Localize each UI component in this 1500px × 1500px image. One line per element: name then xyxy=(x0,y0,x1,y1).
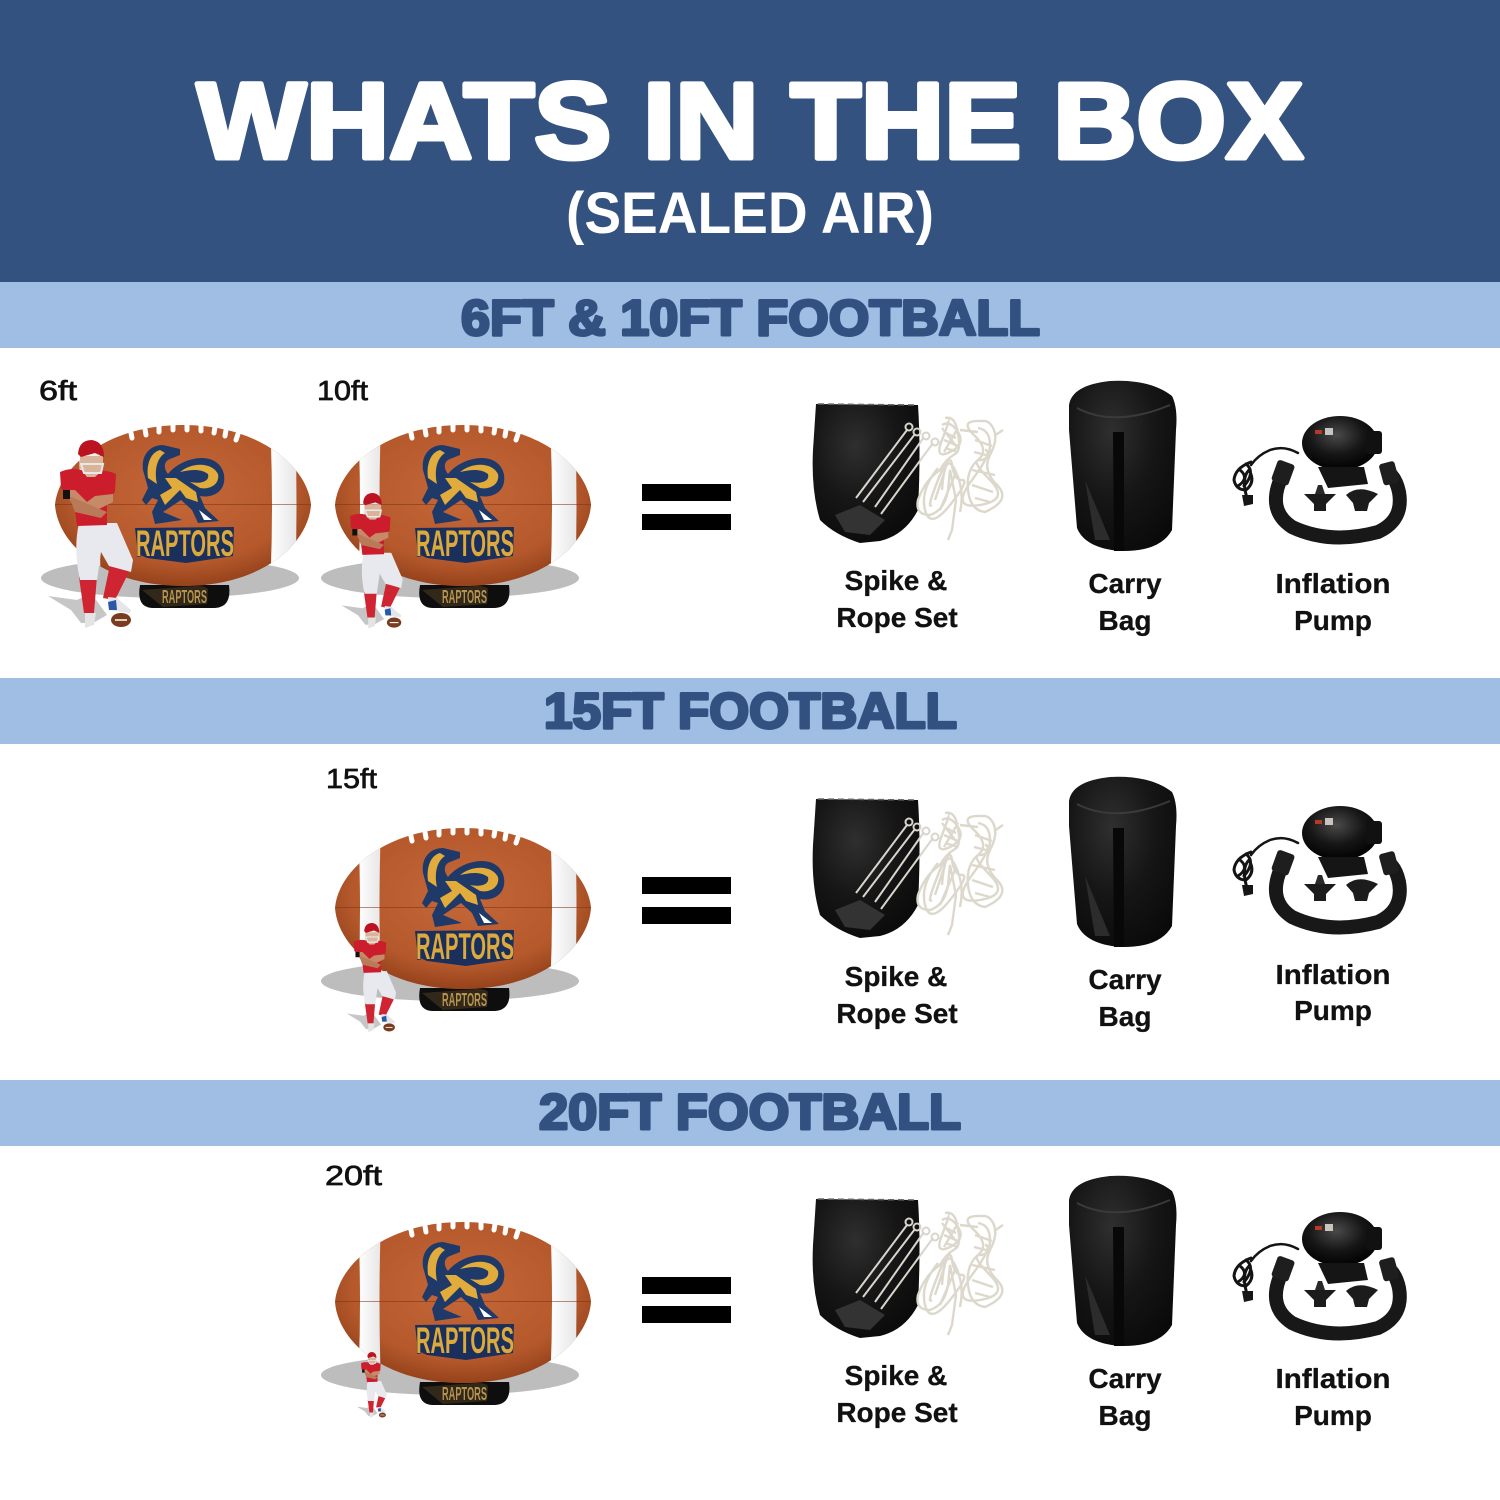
inflation pump 3 xyxy=(1234,1212,1400,1333)
label: spike and rope set 2 xyxy=(836,961,958,1029)
10ft football with player: RAPTORS xyxy=(442,587,487,607)
10ft football with player: RAPTORS xyxy=(416,523,514,564)
section 2 band xyxy=(0,678,1500,744)
label: spike and rope set 3 xyxy=(836,1360,958,1428)
label: carry bag 2: Carry xyxy=(1088,964,1162,995)
label: spike and rope set 2: Spike & xyxy=(845,961,947,992)
section 3 band xyxy=(0,1080,1500,1146)
label: carry bag 2: Bag xyxy=(1099,1001,1151,1032)
label: inflation pump 1: Inflation xyxy=(1276,568,1390,599)
label: inflation pump 3: Inflation xyxy=(1276,1363,1390,1394)
15ft football with player xyxy=(321,823,595,1032)
20ft football with player: RAPTORS xyxy=(442,1384,487,1404)
20ft football with player xyxy=(321,1217,595,1418)
6ft football with player: RAPTORS xyxy=(136,523,234,564)
label: carry bag 3 xyxy=(1088,1363,1162,1431)
label: spike and rope set 1: Spike & xyxy=(845,565,947,596)
section 1 size label: 6ft: 6ft xyxy=(39,375,77,406)
title: WHATS IN THE BOX xyxy=(197,60,1303,181)
section 1 size label: 10ft: 10ft xyxy=(317,375,368,406)
section 1 heading: 6FT & 10FT FOOTBALL xyxy=(461,290,1040,346)
label: carry bag 1: Carry xyxy=(1088,568,1162,599)
label: inflation pump 3 xyxy=(1276,1363,1390,1431)
20ft football with player: RAPTORS xyxy=(416,1320,514,1361)
label: spike and rope set 3: Spike & xyxy=(845,1360,947,1391)
header panel xyxy=(0,0,1500,282)
15ft football with player: RAPTORS xyxy=(416,926,514,967)
carry bag 1 xyxy=(1069,381,1176,551)
label: carry bag 1 xyxy=(1088,568,1162,636)
label: carry bag 1: Bag xyxy=(1099,605,1151,636)
label: spike and rope set 3: Rope Set xyxy=(836,1397,958,1428)
6ft football with player xyxy=(41,420,315,628)
subtitle: (SEALED AIR) xyxy=(566,181,934,246)
label: inflation pump 2 xyxy=(1276,959,1390,1026)
label: carry bag 3: Bag xyxy=(1099,1400,1151,1431)
equals sign 1 xyxy=(642,484,731,530)
section 2 size label: 15ft: 15ft xyxy=(326,763,377,794)
section 2 heading: 15FT FOOTBALL xyxy=(544,683,957,739)
section 3 heading: 20FT FOOTBALL xyxy=(539,1084,961,1140)
label: inflation pump 1 xyxy=(1276,568,1390,636)
label: spike and rope set 1 xyxy=(836,565,958,633)
label: inflation pump 2: Inflation xyxy=(1276,959,1390,990)
section 3 size label: 20ft: 20ft xyxy=(325,1160,382,1191)
6ft football with player: RAPTORS xyxy=(162,587,207,607)
spike and rope set 3 xyxy=(813,1199,1003,1338)
label: spike and rope set 1: Rope Set xyxy=(836,602,958,633)
label: carry bag 2 xyxy=(1088,964,1162,1032)
spike and rope set 2 xyxy=(813,799,1003,938)
inflation pump 1 xyxy=(1234,416,1400,537)
label: inflation pump 1: Pump xyxy=(1294,605,1372,636)
label: inflation pump 3: Pump xyxy=(1294,1400,1372,1431)
equals sign 3 xyxy=(642,1277,731,1323)
label: inflation pump 2: Pump xyxy=(1294,995,1372,1026)
spike and rope set 1 xyxy=(813,404,1003,543)
equals sign 2 xyxy=(642,877,731,924)
inflation pump 2 xyxy=(1234,806,1400,927)
section 1 band xyxy=(0,282,1500,348)
10ft football with player xyxy=(321,420,595,628)
carry bag 2 xyxy=(1069,777,1176,947)
carry bag 3 xyxy=(1069,1176,1176,1346)
label: spike and rope set 2: Rope Set xyxy=(836,998,958,1029)
label: carry bag 3: Carry xyxy=(1088,1363,1162,1394)
15ft football with player: RAPTORS xyxy=(442,990,487,1010)
